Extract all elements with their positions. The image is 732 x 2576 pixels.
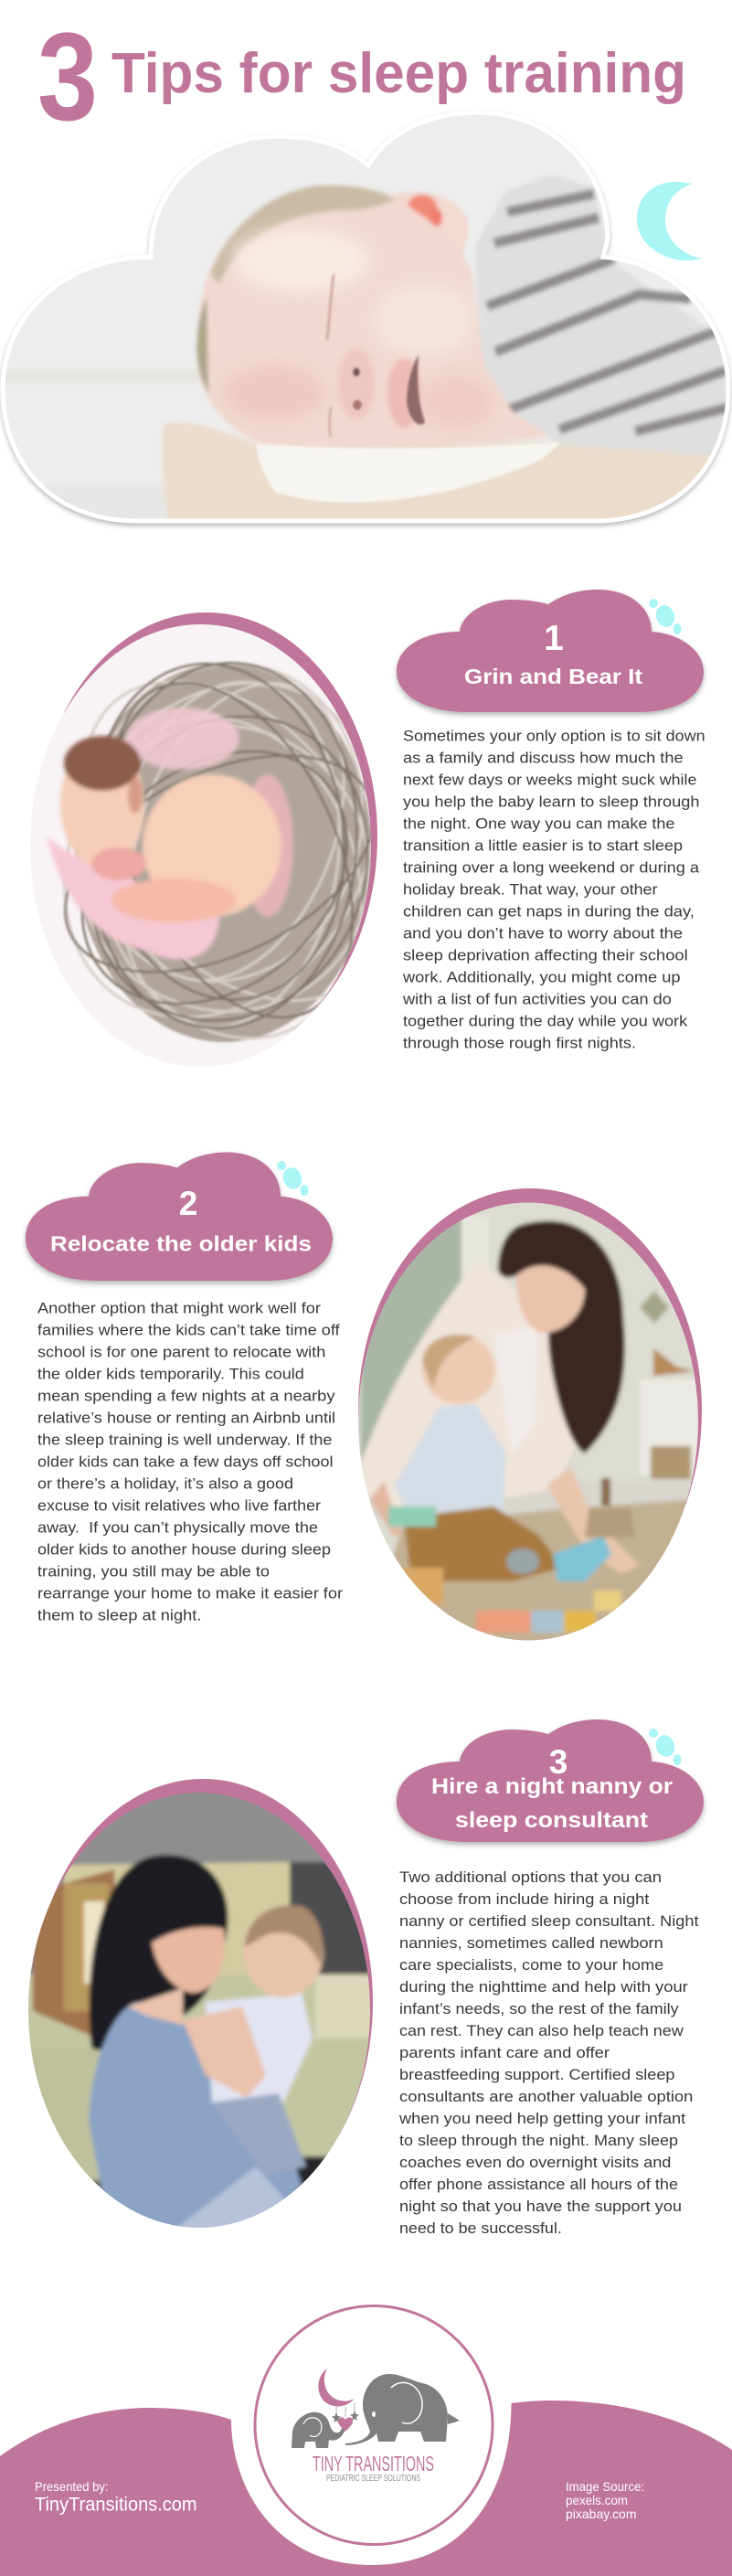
icon: large elephant bbox=[345, 2374, 460, 2445]
text: tip 1 body: next few days or weeks might suck while bbox=[403, 772, 696, 789]
text: tip 3 body: nanny or certified sleep consultant. Night bbox=[399, 1913, 699, 1930]
text: tip 1 body: with a list of fun activities you can do bbox=[402, 992, 672, 1008]
text: tip 3 body: when you need help getting your infant bbox=[398, 2111, 686, 2127]
title: Tips for sleep training bbox=[111, 42, 686, 105]
footer band bbox=[0, 2400, 732, 2576]
text: tip 1 body: children can get naps in during the day, bbox=[403, 904, 695, 921]
footer: presented by: Presented by: bbox=[35, 2479, 108, 2494]
text: tip 3 body: to sleep through the night. Many sleep bbox=[399, 2133, 678, 2149]
tip 3 heading cloud: 3 bbox=[549, 1743, 568, 1781]
footer: image source bbox=[566, 2479, 644, 2521]
text: tip 3 body: nannies, sometimes called newborn bbox=[399, 1935, 663, 1952]
text: tip 3 body: infant’s needs, so the rest of the family bbox=[399, 2001, 679, 2017]
text: tip 3 body: choose from include hiring a night bbox=[399, 1891, 650, 1908]
text: tip 1 body: transition a little easier is to start sleep bbox=[403, 838, 683, 855]
text: tip 2 body: school is for one parent to relocate with bbox=[37, 1345, 325, 1361]
text: tip 1 body: work. Additionally, you might come up bbox=[402, 970, 680, 986]
text: tip 2 body: away. If you can’t physically move the bbox=[37, 1520, 318, 1537]
text: tip 2 body: older kids can take a few days off school bbox=[37, 1454, 333, 1471]
hero photo: sleeping baby in cloud bbox=[0, 110, 732, 530]
text: tip 1 body: holiday break. That way, your other bbox=[403, 882, 658, 899]
icon: bubbles tip 1 bbox=[649, 599, 682, 634]
text: tip 1 body: the night. One way you can make the bbox=[403, 816, 674, 833]
logo badge: TINY TRANSITIONS bbox=[313, 2452, 434, 2475]
text: tip 2 body: families where the kids can’t take time off bbox=[37, 1323, 340, 1339]
text: tip 2 body bbox=[37, 1301, 344, 1624]
footer: presented by: TinyTransitions.com bbox=[35, 2495, 197, 2516]
text: tip 3 body: breastfeeding support. Certified sleep bbox=[399, 2067, 674, 2083]
photo oval: mother and toddler playing bbox=[356, 1188, 704, 1645]
text: tip 3 body: offer phone assistance all hours of the bbox=[399, 2177, 678, 2193]
title: 3 bbox=[37, 7, 98, 147]
text: tip 2 body: or there’s a holiday, it’s also a good bbox=[37, 1476, 293, 1493]
tip 1 heading cloud: Grin and Bear It bbox=[464, 665, 642, 688]
text: tip 1 body: you help the baby learn to sleep through bbox=[403, 794, 700, 811]
icon: small elephant bbox=[292, 2412, 346, 2448]
text: tip 3 body: care specialists, come to your home bbox=[399, 1957, 663, 1974]
tip 2 heading cloud bbox=[26, 1153, 333, 1281]
text: tip 2 body: mean spending a few nights at a nearby bbox=[37, 1389, 335, 1405]
text: tip 2 body: relative’s house or renting an Airbnb until bbox=[37, 1410, 335, 1427]
tip 1 heading cloud bbox=[397, 590, 704, 712]
title bbox=[37, 7, 686, 147]
photo oval: mother holding baby bbox=[23, 1779, 379, 2235]
text: tip 2 body: training, you still may be able to bbox=[37, 1564, 270, 1581]
text: tip 1 body: as a family and discuss how much the bbox=[403, 750, 684, 767]
text: tip 2 body: them to sleep at night. bbox=[37, 1608, 201, 1624]
footer: image source: Image Source: bbox=[566, 2479, 644, 2494]
icon: mobile heart and stars bbox=[332, 2402, 359, 2432]
text: tip 3 body: can rest. They can also help teach new bbox=[399, 2023, 684, 2039]
text: tip 3 body: need to be successful. bbox=[399, 2220, 562, 2237]
text: tip 3 body: Two additional options that you can bbox=[399, 1869, 662, 1886]
text: tip 1 body: Sometimes your only option is to sit down bbox=[403, 729, 705, 745]
text: tip 1 body: through those rough first nights. bbox=[403, 1036, 636, 1052]
text: tip 3 body: coaches even do overnight visits and bbox=[399, 2155, 671, 2171]
tip 2 heading cloud: Relocate the older kids bbox=[50, 1232, 312, 1256]
icon: crescent moon logo bbox=[318, 2368, 355, 2406]
text: tip 2 body: the sleep training is well underway. If the bbox=[37, 1432, 332, 1449]
text: tip 2 body: the older kids temporarily. This could bbox=[37, 1367, 304, 1383]
text: tip 1 body: and you don’t have to worry about the bbox=[403, 926, 683, 942]
logo badge bbox=[255, 2305, 493, 2545]
photo oval: baby in nest bbox=[30, 612, 377, 1067]
text: tip 1 body: sleep deprivation affecting their school bbox=[403, 948, 688, 964]
icon: bubbles tip 2 bbox=[277, 1161, 309, 1196]
text: tip 3 body: consultants are another valuable option bbox=[399, 2089, 693, 2105]
footer: image source: pexels.com bbox=[566, 2493, 628, 2507]
tip 3 heading cloud: Hire a night nanny or bbox=[431, 1774, 673, 1799]
footer: presented by bbox=[35, 2479, 197, 2516]
tip 2 heading cloud: 2 bbox=[179, 1185, 197, 1222]
tip 1 heading cloud: 1 bbox=[544, 619, 564, 658]
tip 3 heading cloud: sleep consultant bbox=[455, 1808, 648, 1833]
text: tip 1 body bbox=[402, 729, 705, 1052]
text: tip 2 body: older kids to another house during sleep bbox=[37, 1542, 331, 1559]
tip 3 heading cloud bbox=[397, 1719, 704, 1842]
logo badge: PEDIATRIC SLEEP SOLUTIONS bbox=[326, 2473, 420, 2484]
text: tip 2 body: excuse to visit relatives who live farther bbox=[37, 1498, 322, 1515]
icon: crescent moon bbox=[637, 182, 702, 261]
footer: image source: pixabay.com bbox=[566, 2507, 636, 2521]
text: tip 2 body: rearrange your home to make it easier for bbox=[37, 1586, 344, 1602]
text: tip 3 body bbox=[398, 1869, 699, 2237]
text: tip 3 body: parents infant care and offer bbox=[399, 2045, 610, 2061]
icon: bubbles tip 3 bbox=[649, 1729, 682, 1765]
text: tip 3 body: night so that you have the support you bbox=[399, 2198, 682, 2215]
text: tip 1 body: together during the day while you work bbox=[403, 1014, 688, 1030]
text: tip 3 body: during the nighttime and help with your bbox=[399, 1979, 688, 1996]
text: tip 2 body: Another option that might work well for bbox=[37, 1301, 322, 1317]
text: tip 1 body: training over a long weekend or during a bbox=[403, 860, 700, 877]
